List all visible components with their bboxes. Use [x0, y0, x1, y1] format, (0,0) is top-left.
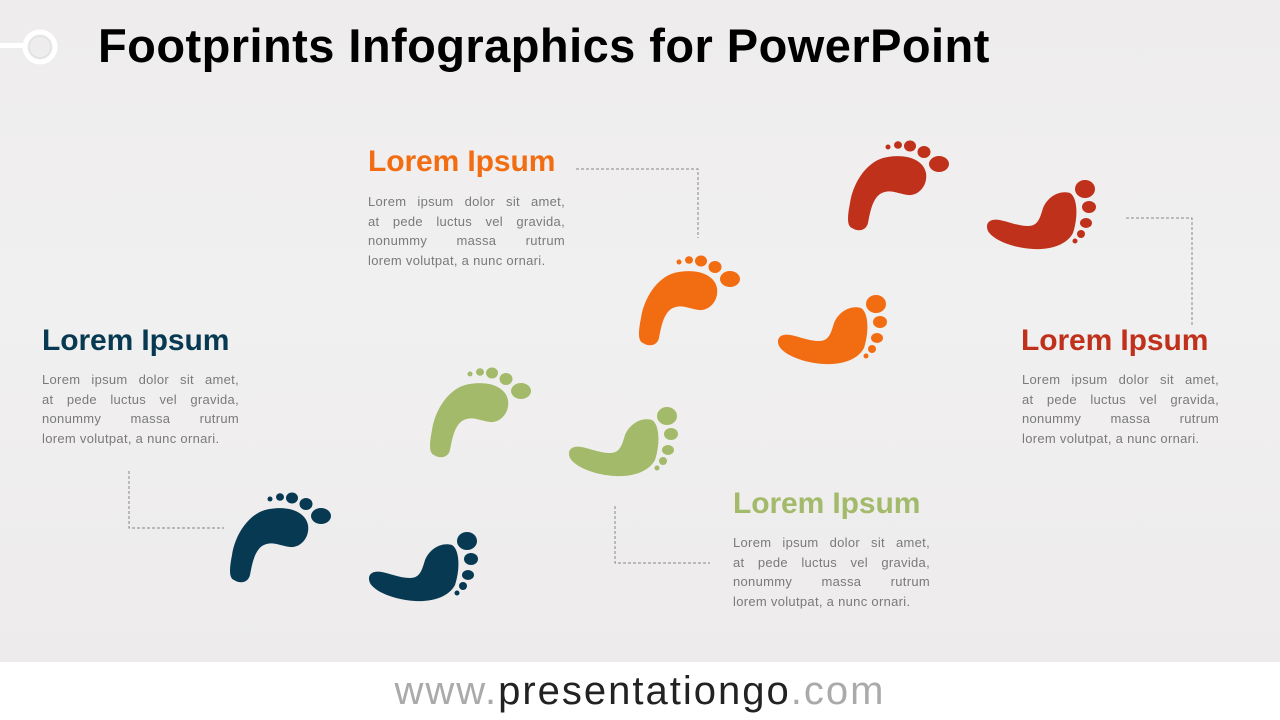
text: green: [733, 535, 930, 608]
text: green: lorem volutpat, a nunc ornari.: [733, 594, 910, 608]
footprints: navy: [230, 492, 478, 601]
text: red: [1022, 372, 1219, 446]
text: orange: at pede luctus vel gravida,: [368, 214, 565, 228]
title: Footprints Infographics for PowerPoint: [98, 19, 990, 72]
heading: navy: Lorem Ipsum: [42, 324, 229, 357]
heading: green: Lorem Ipsum: [733, 487, 920, 520]
text: red: lorem volutpat, a nunc ornari.: [1022, 430, 1199, 446]
text: green: Lorem ipsum dolor sit amet,: [733, 535, 930, 550]
text: orange: lorem volutpat, a nunc ornari.: [368, 252, 545, 268]
footprints: green: [430, 368, 678, 476]
footprints: red: [848, 140, 1096, 249]
text: navy: lorem volutpat, a nunc ornari.: [42, 430, 219, 446]
footer url: www.presentationgo.com: [395, 669, 885, 713]
text: navy: at pede luctus vel gravida,: [42, 392, 239, 406]
heading: orange: Lorem Ipsum: [368, 145, 555, 178]
footprints: orange: [639, 256, 887, 364]
text: orange: nonummy massa rutrum: [368, 233, 565, 248]
text: navy: Lorem ipsum dolor sit amet,: [42, 372, 239, 387]
text: orange: Lorem ipsum dolor sit amet,: [368, 194, 565, 209]
text: red: at pede luctus vel gravida,: [1022, 392, 1219, 406]
text: red: Lorem ipsum dolor sit amet,: [1022, 372, 1219, 387]
text: red: nonummy massa rutrum: [1022, 411, 1219, 426]
text: green: nonummy massa rutrum: [733, 574, 930, 589]
text: navy: [42, 372, 239, 446]
heading: red: Lorem Ipsum: [1021, 324, 1208, 357]
text: orange: [368, 194, 565, 268]
text: green: at pede luctus vel gravida,: [733, 554, 930, 570]
text: navy: nonummy massa rutrum: [42, 411, 239, 426]
icon: magnifier: [0, 30, 58, 64]
